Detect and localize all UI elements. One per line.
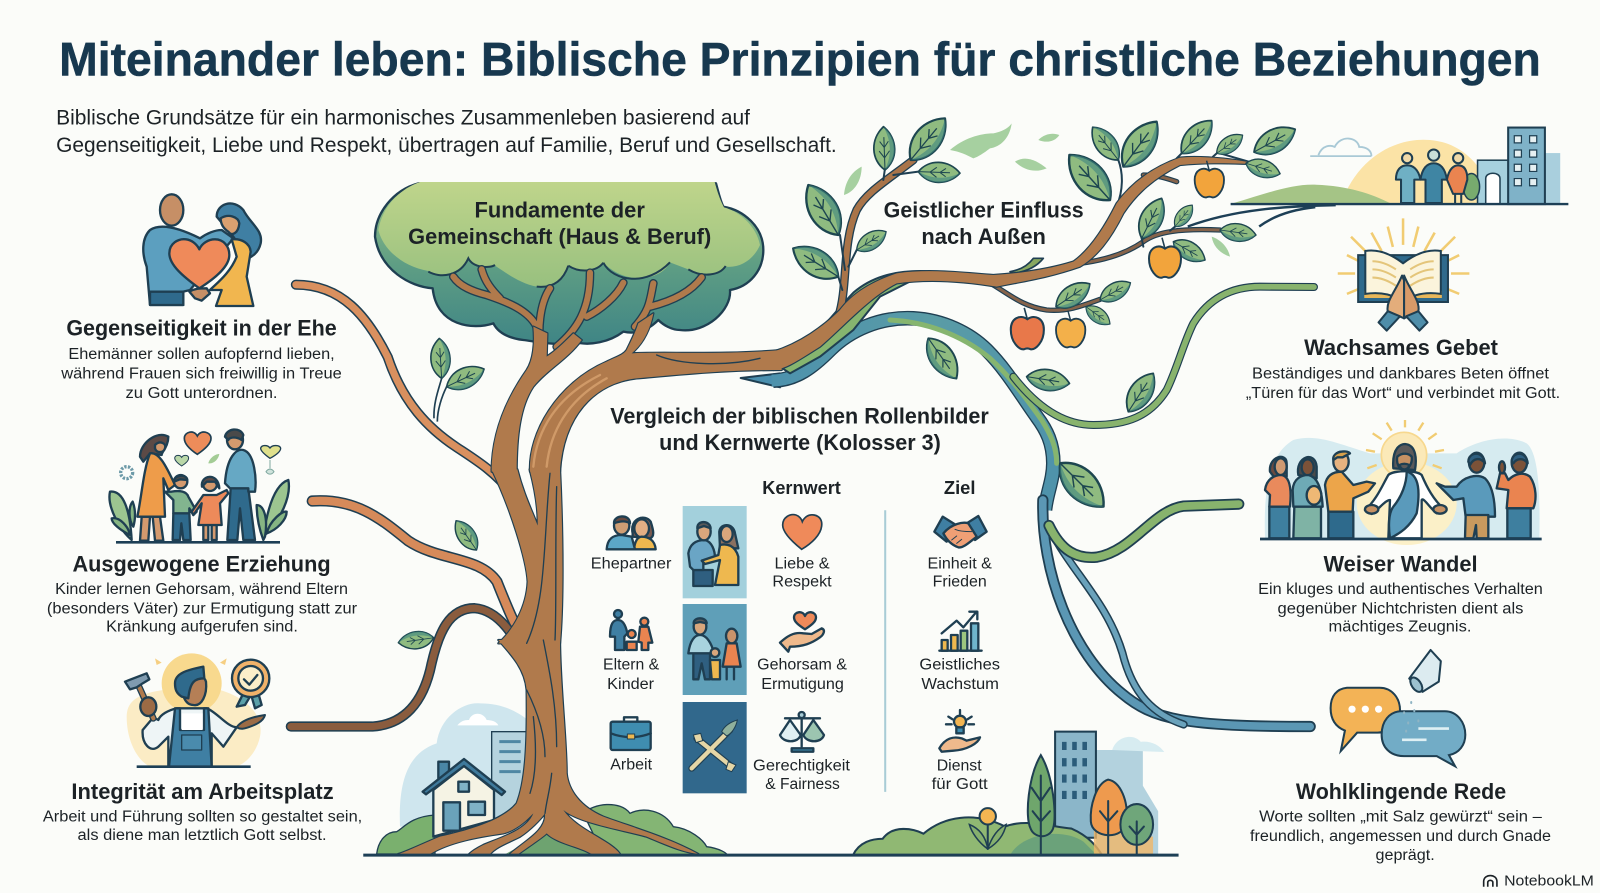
text: wise conduct bbox=[1258, 551, 1543, 636]
icon: scales bbox=[780, 712, 824, 752]
sprigs on lower branches bbox=[397, 516, 484, 651]
text: pleasant speech: geprägt. bbox=[1376, 847, 1435, 864]
text: wise conduct: Weiser Wandel bbox=[1323, 551, 1478, 576]
icon: parents and kids bbox=[610, 610, 652, 650]
row: work: Arbeit bbox=[610, 756, 653, 773]
column headings: Ziel bbox=[944, 477, 976, 498]
text: pleasant speech: freundlich, angemessen und durch Gnade bbox=[1250, 828, 1551, 845]
row: spouses: Einheit & bbox=[928, 555, 992, 572]
text: balanced upbringing: (besonders Väter) zur Ermutigung statt zur bbox=[47, 600, 357, 617]
icon: growth chart bbox=[939, 612, 982, 651]
icon: mother bbox=[137, 435, 175, 541]
row: spouses: Ehepartner bbox=[591, 555, 671, 572]
icon: salt shaker bbox=[1404, 650, 1441, 732]
icon: green tree bbox=[1028, 755, 1055, 855]
bark lines bbox=[527, 473, 557, 813]
text: integrity at work: Integrität am Arbeitsplatz bbox=[71, 779, 334, 804]
vine: blue and green with branch to prayer bbox=[741, 287, 1314, 510]
bottom scene: house and city bbox=[377, 703, 528, 854]
text: integrity at work bbox=[43, 779, 362, 844]
row: parents and children: Eltern & bbox=[603, 656, 660, 673]
apples bbox=[1011, 161, 1224, 349]
icon: Jesus bbox=[1365, 444, 1447, 538]
green ribbon under limb bbox=[780, 258, 1043, 373]
icon: medal bbox=[232, 660, 269, 708]
icon: briefcase bbox=[611, 717, 651, 750]
illustration: speech bubbles and salt bbox=[1331, 650, 1465, 766]
text: wise conduct: Ein kluges und authentisches Verhalten bbox=[1258, 581, 1543, 598]
text: mutuality in marriage: Gegenseitigkeit in der Ehe bbox=[66, 316, 337, 341]
row: work: Dienst bbox=[937, 757, 982, 774]
illustration: family bbox=[109, 430, 289, 542]
text: mutuality in marriage: während Frauen sich freiwillig in Treue bbox=[60, 366, 342, 383]
NotebookLM mark: NotebookLM bbox=[1504, 874, 1594, 890]
text: balanced upbringing: Kränkung aufgerufen sind. bbox=[106, 619, 298, 636]
text: balanced upbringing bbox=[47, 551, 357, 636]
icon: blue bubble bbox=[1382, 711, 1465, 766]
canopy branches bbox=[453, 269, 702, 357]
icon: shirt and overalls bbox=[143, 708, 237, 767]
icon: plants bbox=[109, 480, 289, 540]
icon: round tree bbox=[1120, 804, 1153, 855]
leaves on upper branches bbox=[786, 110, 1257, 330]
connector: marriage branch bbox=[296, 285, 510, 492]
text: integrity at work: Arbeit und Führung sollten so gestaltet sein, bbox=[43, 808, 362, 825]
outward influence heading bbox=[884, 197, 1084, 249]
text: integrity at work: als diene man letztlich Gott selbst. bbox=[78, 827, 327, 844]
row: spouses bbox=[591, 506, 992, 598]
row: work: Gerechtigkeit bbox=[753, 757, 851, 774]
icon: spouses bbox=[607, 516, 656, 549]
icon: left group of people bbox=[1265, 451, 1375, 538]
icon: tall building bbox=[1508, 128, 1545, 204]
trunk and main limb bbox=[398, 157, 1260, 854]
text: mutuality in marriage: zu Gott unterordnen. bbox=[126, 385, 278, 402]
icon: house bbox=[423, 759, 505, 837]
row: work: & Fairness bbox=[765, 776, 840, 793]
comparison heading bbox=[610, 403, 989, 455]
thin fruit branches bbox=[838, 153, 1260, 317]
canopy highlight bbox=[378, 182, 760, 287]
ground line and thin branches bbox=[1188, 204, 1568, 227]
bottom scene: hills, building and trees bbox=[853, 732, 1164, 855]
icon: father bbox=[225, 430, 256, 540]
canopy heading: Fundamente der bbox=[474, 197, 645, 222]
photo: couple bbox=[683, 506, 747, 598]
icon: flower bbox=[969, 808, 1006, 849]
photo: parents bbox=[683, 604, 747, 695]
text: wise conduct: gegenüber Nichtchristen dient als bbox=[1278, 600, 1524, 617]
text: balanced upbringing: Kinder lernen Gehorsam, während Eltern bbox=[55, 581, 348, 598]
connector: upbringing branch bbox=[312, 501, 531, 653]
subtitle bbox=[56, 106, 837, 157]
illustration: worker bbox=[125, 653, 269, 767]
tree canopy bbox=[375, 182, 763, 344]
icon: head bbox=[175, 667, 206, 705]
row: spouses: Respekt bbox=[772, 574, 832, 591]
canopy heading bbox=[408, 197, 711, 249]
row: parents and children: Kinder bbox=[607, 676, 654, 693]
canopy heading: Gemeinschaft (Haus & Beruf) bbox=[408, 224, 711, 249]
row: work: für Gott bbox=[932, 776, 988, 793]
sprig on marriage branch bbox=[430, 338, 488, 422]
row: parents and children bbox=[603, 604, 1000, 695]
ground line bbox=[363, 854, 1179, 857]
text: pleasant speech: Wohlklingende Rede bbox=[1296, 779, 1506, 804]
text: wise conduct: mächtiges Zeugnis. bbox=[1329, 619, 1471, 636]
illustration: wise conduct bbox=[1260, 420, 1542, 545]
text: balanced upbringing: Ausgewogene Erziehung bbox=[72, 551, 331, 576]
row: parents and children: Ermutigung bbox=[761, 676, 844, 693]
text: mutuality in marriage: Ehemänner sollen aufopfernd lieben, bbox=[68, 346, 335, 363]
icon: orange bubble bbox=[1331, 688, 1400, 751]
illustration: couple with heart bbox=[143, 194, 261, 306]
icon: right group of people bbox=[1437, 453, 1536, 538]
column headings: Kernwert bbox=[762, 477, 841, 498]
text: watchful prayer: Wachsames Gebet bbox=[1304, 335, 1498, 360]
row: parents and children: Wachstum bbox=[921, 676, 999, 693]
floating pale leaves bbox=[844, 123, 1230, 257]
comparison heading: Vergleich der biblischen Rollenbilder bbox=[610, 403, 989, 428]
ground hills around tree roots bbox=[503, 805, 727, 855]
title: Miteinander leben: Biblische Prinzipien für christliche Beziehungen bbox=[59, 34, 1541, 86]
leaf on blue strand bbox=[1050, 453, 1114, 517]
subtitle: Biblische Grundsätze für ein harmonisches Zusammenleben basierend auf bbox=[56, 106, 750, 129]
text: watchful prayer: „Türen für das Wort“ und verbindet mit Gott. bbox=[1246, 385, 1560, 402]
icon: children bbox=[165, 475, 228, 540]
comparison table bbox=[591, 477, 1000, 793]
leaves on vines bbox=[919, 332, 1162, 418]
text: mutuality in marriage bbox=[60, 316, 342, 402]
connector: blue strands to speech bbox=[1043, 500, 1310, 727]
outward influence heading: Geistlicher Einfluss bbox=[884, 197, 1084, 222]
outward influence heading: nach Außen bbox=[921, 224, 1046, 249]
illustration: community scene top right bbox=[1188, 128, 1568, 227]
row: work bbox=[610, 702, 988, 793]
icon: heart in hand bbox=[780, 612, 824, 652]
text: watchful prayer bbox=[1246, 335, 1560, 402]
icon: hammer bbox=[125, 673, 156, 718]
row: parents and children: Gehorsam & bbox=[757, 656, 847, 673]
icon: praying hands bbox=[1379, 276, 1428, 331]
icon: hand with light bulb bbox=[939, 710, 980, 752]
photo: tools bbox=[683, 702, 747, 793]
illustration: book and praying hands bbox=[1338, 218, 1469, 331]
connector: green branch to wise conduct bbox=[1049, 504, 1239, 557]
icon: three people bbox=[1396, 149, 1467, 203]
column headings bbox=[762, 477, 976, 498]
icon: hand bbox=[237, 715, 265, 729]
text: watchful prayer: Beständiges und dankbares Beten öffnet bbox=[1252, 366, 1550, 383]
row: spouses: Liebe & bbox=[774, 555, 830, 572]
row: parents and children: Geistliches bbox=[919, 656, 1000, 673]
highlight on limb bbox=[533, 355, 760, 467]
icon: orange tree bbox=[1091, 780, 1127, 855]
icon: heart bbox=[783, 515, 822, 549]
subtitle: Gegenseitigkeit, Liebe und Respekt, übertragen auf Familie, Beruf und Gesellschaft. bbox=[56, 134, 837, 157]
comparison heading: und Kernwerte (Kolosser 3) bbox=[659, 430, 941, 455]
connector: workplace branch bbox=[291, 608, 529, 727]
text: pleasant speech: Worte sollten „mit Salz gewürzt“ sein – bbox=[1259, 808, 1542, 825]
icon: handshake bbox=[934, 516, 987, 547]
text: pleasant speech bbox=[1250, 779, 1551, 864]
row: spouses: Frieden bbox=[933, 574, 987, 591]
leaves at far end of upper branch bbox=[1243, 119, 1301, 182]
